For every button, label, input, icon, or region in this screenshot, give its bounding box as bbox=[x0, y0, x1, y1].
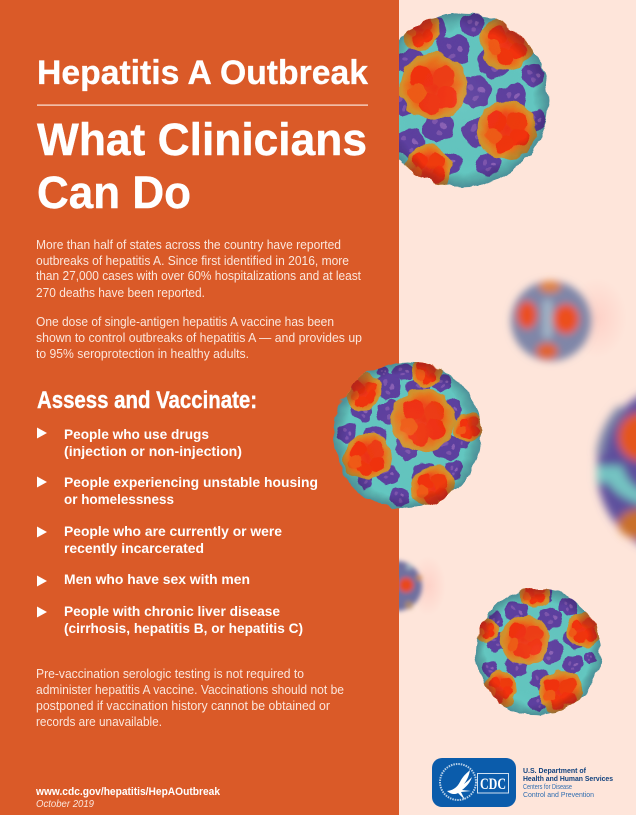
virus: top right bbox=[399, 12, 550, 188]
text block: serologic testing note: administer hepatitis A vaccine. Vaccinations should not be bbox=[36, 682, 344, 697]
text block: intro paragraph 1: More than half of states across the country have reported bbox=[36, 237, 341, 252]
text block: serologic testing note: Pre-vaccination serologic testing is not required to bbox=[36, 666, 304, 681]
text block: intro paragraph 1: than 27,000 cases with over 60% hospitalizations and at least bbox=[36, 268, 361, 283]
text: agency names: Control and Prevention bbox=[523, 790, 594, 799]
text block: intro paragraph 2: to 95% seroprotection in healthy adults. bbox=[36, 346, 249, 361]
text block: serologic testing note: records are unavailable. bbox=[36, 714, 162, 729]
glow behind small virus bbox=[410, 556, 446, 616]
bullet: unstable housing bbox=[37, 474, 318, 507]
logo: CDC box: CDC bbox=[480, 776, 506, 793]
logo: CDC box bbox=[478, 774, 508, 793]
text: agency names bbox=[523, 766, 613, 799]
title: What Clinicians bbox=[37, 114, 367, 165]
title: Hepatitis A Outbreak bbox=[37, 54, 368, 92]
footer: url and date: www.cdc.gov/hepatitis/HepAOutbreak bbox=[35, 786, 221, 798]
bullet: people who use drugs bbox=[37, 426, 242, 459]
footer: url and date: October 2019 bbox=[36, 799, 94, 810]
text block: serologic testing note bbox=[36, 666, 344, 729]
icon: HHS eagle bbox=[440, 764, 476, 800]
text block: serologic testing note: postponed if vaccination history cannot be obtained or bbox=[36, 698, 331, 713]
glow behind blurred virus bbox=[567, 278, 627, 358]
text block: intro paragraph 1 bbox=[36, 237, 361, 300]
bullet: chronic liver disease: People with chronic liver disease bbox=[64, 603, 280, 619]
footer: url and date bbox=[35, 786, 221, 810]
bullet: incarcerated bbox=[37, 523, 282, 556]
virus: centre, overlapping panel edge bbox=[333, 356, 483, 510]
virus: blurred right edge bbox=[597, 384, 636, 556]
bullet: chronic liver disease bbox=[37, 603, 303, 636]
virus: blurred middle right bbox=[511, 281, 591, 361]
bullet: unstable housing: or homelessness bbox=[64, 491, 174, 507]
logo: HHS and CDC bbox=[432, 758, 613, 807]
bullet: chronic liver disease: (cirrhosis, hepatitis B, or hepatitis C) bbox=[64, 620, 303, 636]
text block: intro paragraph 2 bbox=[36, 314, 362, 361]
text block: intro paragraph 1: outbreaks of hepatitis A. Since first identified in 2016, more bbox=[36, 253, 349, 268]
title: Can Do bbox=[37, 167, 191, 218]
virus: lower right bbox=[474, 580, 601, 715]
text block: intro paragraph 2: One dose of single-antigen hepatitis A vaccine has been bbox=[36, 314, 334, 329]
text: agency names: Centers for Disease bbox=[523, 782, 572, 791]
bullet: unstable housing: People experiencing unstable housing bbox=[64, 474, 318, 490]
text: agency names: Health and Human Services bbox=[523, 774, 613, 783]
bullet: people who use drugs: People who use drugs bbox=[64, 426, 209, 442]
text: agency names: U.S. Department of bbox=[523, 766, 586, 775]
title bbox=[37, 54, 368, 218]
bullet: men who have sex with men: Men who have sex with men bbox=[64, 571, 250, 587]
heading: assess and vaccinate: Assess and Vaccinate: bbox=[37, 387, 257, 414]
panel: orange left column bbox=[0, 0, 399, 815]
virus: small blurred bbox=[372, 561, 422, 611]
bullet: people who use drugs: (injection or non-injection) bbox=[64, 443, 242, 459]
text block: intro paragraph 1: 270 deaths have been reported. bbox=[36, 285, 205, 300]
bullet: incarcerated: recently incarcerated bbox=[64, 540, 204, 556]
text block: intro paragraph 2: shown to control outbreaks of hepatitis A — and provides up bbox=[36, 330, 362, 345]
bullet: incarcerated: People who are currently or were bbox=[64, 523, 282, 539]
list: risk groups bbox=[37, 426, 318, 636]
